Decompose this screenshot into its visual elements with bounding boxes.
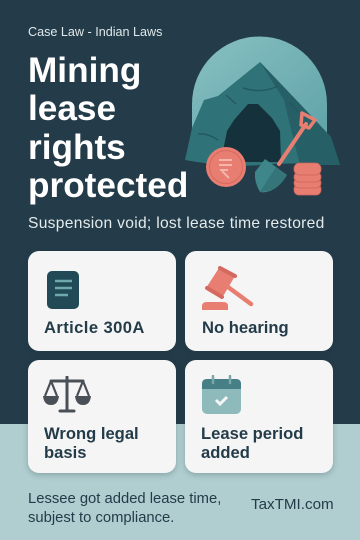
title (28, 51, 188, 205)
arch backdrop (192, 36, 327, 140)
icon: calendar (202, 375, 241, 414)
label (201, 424, 303, 462)
card: Article 300A (28, 251, 176, 351)
illustration: mine with shovel and coins (185, 36, 340, 196)
card: Lease period added (185, 360, 333, 473)
icon: document (47, 271, 79, 309)
title: Mining (28, 51, 141, 90)
icon: gavel (202, 266, 254, 310)
title: rights (28, 128, 126, 167)
footer note (28, 491, 221, 526)
title: lease (28, 89, 116, 128)
label (44, 424, 139, 462)
card: Wrong legal basis (28, 360, 176, 473)
label: No hearing (202, 318, 289, 337)
mountain (185, 62, 340, 166)
category label: Case Law - Indian Laws (28, 25, 162, 39)
rupee coin (206, 147, 246, 187)
footer note: subjest to compliance. (28, 510, 174, 526)
label: Lease period (201, 424, 303, 443)
light bottom band (0, 424, 360, 540)
cave entrance (224, 104, 281, 162)
card: No hearing (185, 251, 333, 351)
label: Wrong legal (44, 424, 139, 443)
coin stack (294, 163, 321, 195)
brand: TaxTMI.com (251, 496, 334, 513)
shovel (255, 113, 315, 192)
footer note: Lessee got added lease time, (28, 491, 221, 507)
label: added (201, 443, 250, 462)
label: basis (44, 443, 86, 462)
subtitle: Suspension void; lost lease time restored (28, 215, 325, 232)
label: Article 300A (44, 318, 145, 337)
icon: scales (43, 376, 91, 412)
title: protected (28, 166, 188, 205)
